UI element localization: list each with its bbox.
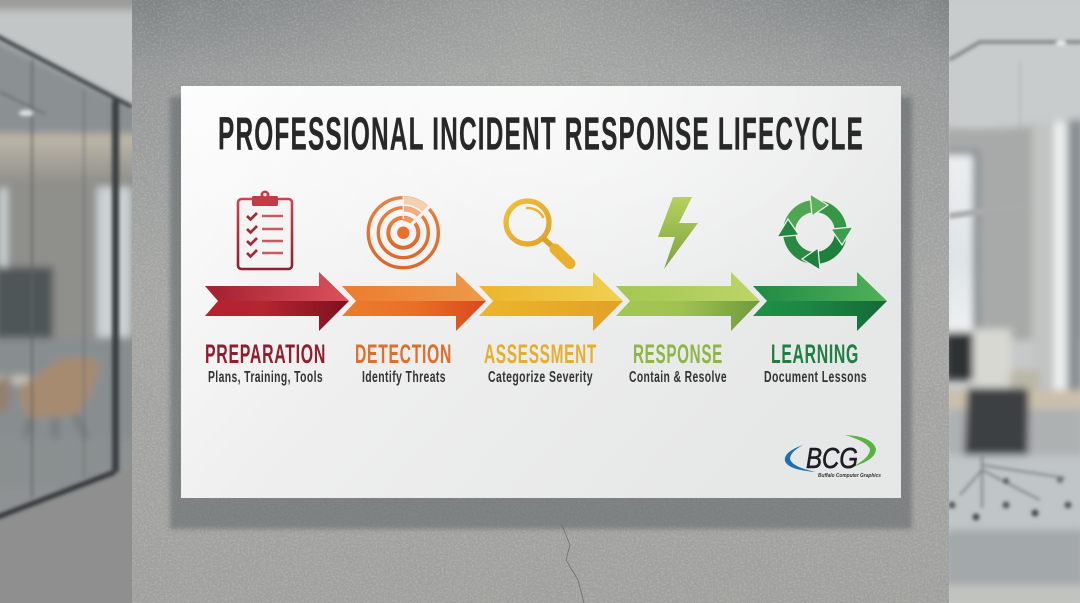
step label: detection: DETECTION (355, 339, 452, 369)
step label: assessment: Categorize Severity (488, 369, 593, 386)
step label: response: Contain & Resolve (629, 369, 727, 386)
logo: BCG: BCG (806, 443, 858, 475)
step label: response (629, 339, 727, 386)
step label: preparation: Plans, Training, Tools (208, 369, 323, 386)
step label: detection: Identify Threats (362, 369, 446, 386)
icon: magnifying glass (506, 201, 570, 264)
logo: BCG (785, 435, 881, 479)
step label: learning (764, 339, 867, 386)
step label: preparation (205, 339, 326, 386)
step label: learning: LEARNING (771, 339, 859, 369)
arrow: detection (342, 272, 486, 331)
whiteboard panel (181, 86, 901, 498)
arrow: assessment (479, 272, 623, 331)
arrow: response (616, 272, 760, 331)
arrow: learning (753, 272, 887, 331)
left background: glass meeting room (0, 0, 140, 603)
step label: detection (355, 339, 452, 386)
icon: clipboard (238, 190, 292, 269)
logo: BCG: Buffalo Computer Graphics (818, 473, 881, 479)
step label: response: RESPONSE (633, 339, 723, 369)
arrow: preparation (205, 272, 349, 331)
step label: preparation: PREPARATION (205, 339, 326, 369)
icon: lightning bolt (658, 197, 698, 269)
icon: radar target (368, 195, 438, 268)
board shadow (170, 97, 912, 529)
step label: assessment: ASSESSMENT (484, 339, 597, 369)
concrete wall (132, 0, 949, 603)
step label: learning: Document Lessons (764, 369, 867, 386)
icon: cycle arrows (777, 194, 853, 270)
right background: open office (945, 0, 1080, 603)
step label: assessment (484, 339, 597, 386)
